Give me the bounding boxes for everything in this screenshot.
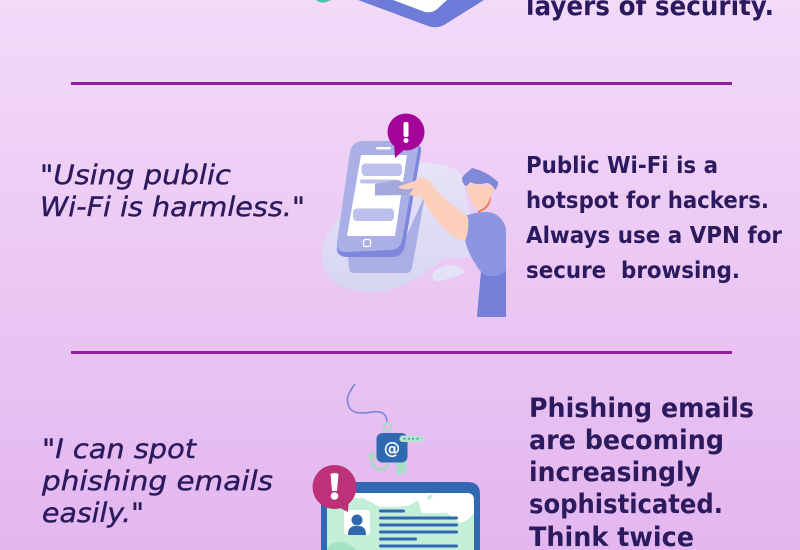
small blob <box>432 265 465 281</box>
answer: phishing <box>529 393 754 550</box>
myth: phishing: easily." <box>42 498 144 529</box>
back phone <box>348 195 425 273</box>
map spot <box>427 495 433 500</box>
answer: public Wi-Fi: Public Wi-Fi is a <box>526 151 718 179</box>
email envelope <box>376 433 408 462</box>
illustration: person using phone with alert <box>322 114 506 317</box>
illustration: top security card (cropped) <box>316 0 484 27</box>
profile icon <box>348 514 366 535</box>
monitor frame <box>321 482 480 550</box>
answer: public Wi-Fi: Always use a VPN for <box>526 221 782 249</box>
divider 1 <box>71 82 732 85</box>
answer: phishing: sophisticated. <box>529 489 723 520</box>
phone body <box>337 141 418 252</box>
answer: phishing: Phishing emails <box>529 393 754 424</box>
myth: public Wi-Fi <box>40 160 305 223</box>
answer: public Wi-Fi <box>526 151 782 284</box>
hook <box>369 453 388 470</box>
monitor screen <box>327 493 474 550</box>
answer: public Wi-Fi: secure browsing. <box>526 256 740 284</box>
phone side <box>337 142 421 257</box>
illustration: phishing email on laptop <box>312 384 480 550</box>
hair <box>462 168 498 190</box>
password pill <box>400 436 424 442</box>
screen map <box>327 498 474 550</box>
head <box>467 184 495 210</box>
arm <box>398 178 468 241</box>
message bars <box>362 164 402 176</box>
myth: phishing: "I can spot <box>42 434 198 465</box>
alert bubble <box>312 465 356 512</box>
answer: public Wi-Fi: hotspot for hackers. <box>526 186 769 214</box>
fishing line <box>347 384 387 423</box>
sliding card <box>375 180 415 196</box>
speaker <box>376 147 391 150</box>
person lower <box>477 270 506 317</box>
exclamation <box>404 122 408 143</box>
home button <box>364 240 370 246</box>
profile card <box>344 510 370 535</box>
answer: phishing: are becoming <box>529 425 724 456</box>
myth: public Wi-Fi: Wi-Fi is harmless." <box>40 192 305 223</box>
alert bubble <box>388 114 424 158</box>
myth: phishing <box>41 434 273 529</box>
blob background <box>322 162 480 292</box>
exclamation <box>330 473 338 500</box>
neck collar <box>478 197 490 212</box>
phone screen <box>347 155 407 236</box>
divider 2 <box>71 351 732 354</box>
map hill <box>327 542 357 550</box>
drips <box>396 460 406 476</box>
myth: public Wi-Fi: "Using public <box>40 160 231 191</box>
text lines <box>379 510 458 548</box>
hook ring <box>384 423 392 431</box>
myth: phishing: phishing emails <box>41 466 273 497</box>
answer: phishing: increasingly <box>529 457 701 488</box>
at sign: @ <box>384 439 400 458</box>
person torso <box>463 212 506 317</box>
